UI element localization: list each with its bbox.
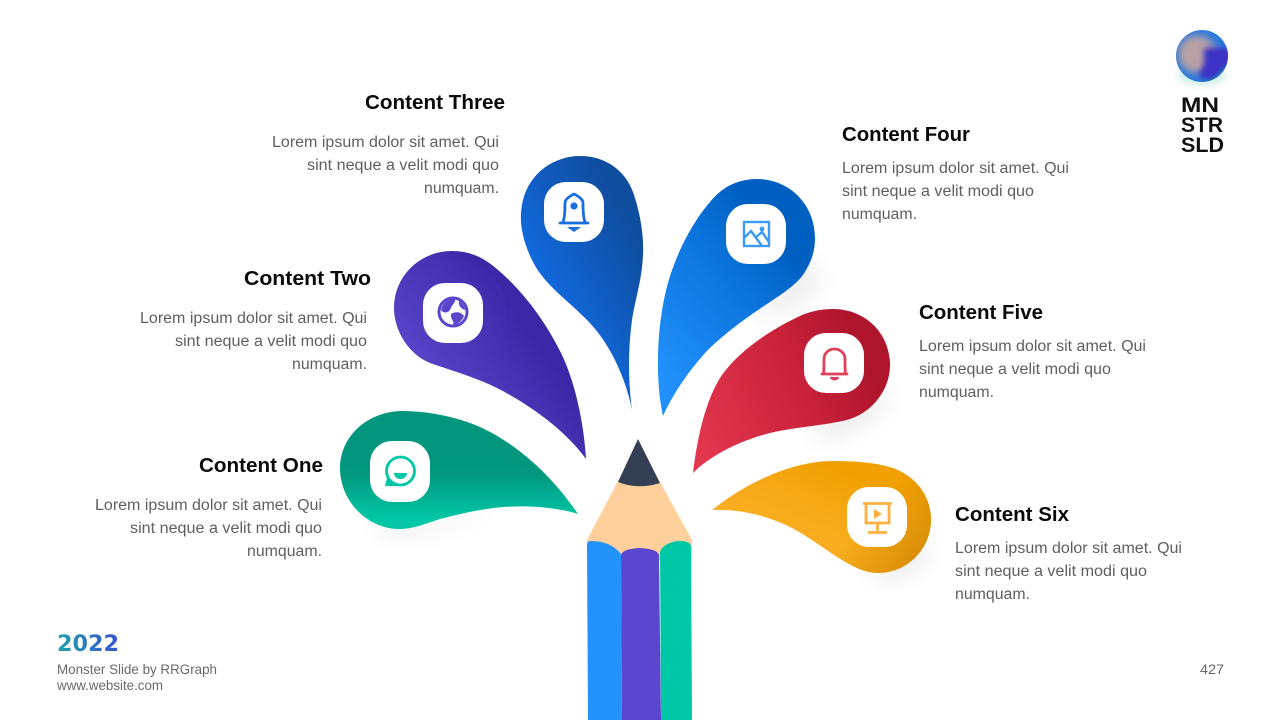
- panel: content two: [140, 251, 586, 459]
- text block: content one: sint neque a velit modi quo: [130, 520, 322, 537]
- footer credit: Monster Slide by RRGraph: [57, 662, 217, 677]
- panel: content five: [693, 302, 1146, 473]
- text block: content three: Lorem ipsum dolor sit amet. Qui: [272, 134, 499, 151]
- text block: content two: Lorem ipsum dolor sit amet. Qui: [140, 310, 367, 327]
- logo text: MN: [1181, 93, 1219, 117]
- logo text: [1181, 93, 1224, 157]
- text block: content six: Lorem ipsum dolor sit amet. Qui: [955, 540, 1182, 557]
- pencil green band: [660, 541, 692, 720]
- icon: presentation board: [847, 487, 907, 547]
- panel: content one: [95, 411, 578, 560]
- petal: bright blue: [658, 179, 827, 416]
- heading: content two: Content Two: [244, 268, 371, 290]
- text block: content four: Lorem ipsum dolor sit amet. Qui: [842, 160, 1069, 177]
- icon: bell: [804, 333, 864, 393]
- text block: content four: numquam.: [842, 206, 917, 223]
- heading: content three: Content Three: [365, 92, 505, 114]
- text block: content five: sint neque a velit modi quo: [919, 361, 1111, 378]
- icon: chat bubble: [370, 441, 430, 502]
- heading: content one: Content One: [199, 455, 323, 477]
- icon: globe: [423, 283, 483, 343]
- panel: content four: [658, 124, 1069, 416]
- logo text: SLD: [1181, 133, 1224, 157]
- text block: content six: [955, 540, 1182, 603]
- heading: content six: Content Six: [955, 504, 1069, 526]
- panel: content three: [272, 92, 643, 410]
- pencil blue band: [587, 541, 622, 720]
- text block: content three: [272, 134, 499, 197]
- year: 2022: [57, 632, 119, 657]
- text block: content one: Lorem ipsum dolor sit amet. Qui: [95, 497, 322, 514]
- pencil: [587, 439, 692, 720]
- text block: content five: [919, 338, 1146, 401]
- pencil purple band: [621, 548, 661, 720]
- page number: 427: [1200, 661, 1224, 677]
- text block: content four: sint neque a velit modi quo: [842, 183, 1034, 200]
- pencil wood: [587, 462, 692, 560]
- text block: content five: Lorem ipsum dolor sit amet. Qui: [919, 338, 1146, 355]
- petal: red: [693, 309, 892, 473]
- logo: [1176, 30, 1228, 152]
- text block: content three: numquam.: [424, 180, 499, 197]
- petal: orange: [712, 461, 935, 580]
- text block: content two: numquam.: [292, 356, 367, 373]
- text block: content five: numquam.: [919, 384, 994, 401]
- logo sphere: [1176, 30, 1234, 88]
- footer: [56, 632, 1224, 693]
- heading: content four: Content Four: [842, 124, 970, 146]
- icon: image: [726, 204, 786, 264]
- petal: purple: [394, 251, 586, 459]
- heading: content five: Content Five: [919, 302, 1043, 324]
- text block: content two: [140, 310, 367, 373]
- text block: content four: [842, 160, 1069, 223]
- pencil lead: [618, 439, 660, 486]
- logo text: STR: [1181, 113, 1223, 137]
- icon: rocket: [544, 182, 604, 242]
- text block: content three: sint neque a velit modi quo: [307, 157, 499, 174]
- petal: green: [340, 411, 578, 540]
- text block: content one: [95, 497, 322, 560]
- text block: content six: numquam.: [955, 586, 1030, 603]
- footer website: www.website.com: [56, 678, 163, 693]
- petal: dark blue: [521, 156, 643, 410]
- text block: content six: sint neque a velit modi quo: [955, 563, 1147, 580]
- text block: content two: sint neque a velit modi quo: [175, 333, 367, 350]
- text block: content one: numquam.: [247, 543, 322, 560]
- panel: content six: [712, 461, 1182, 603]
